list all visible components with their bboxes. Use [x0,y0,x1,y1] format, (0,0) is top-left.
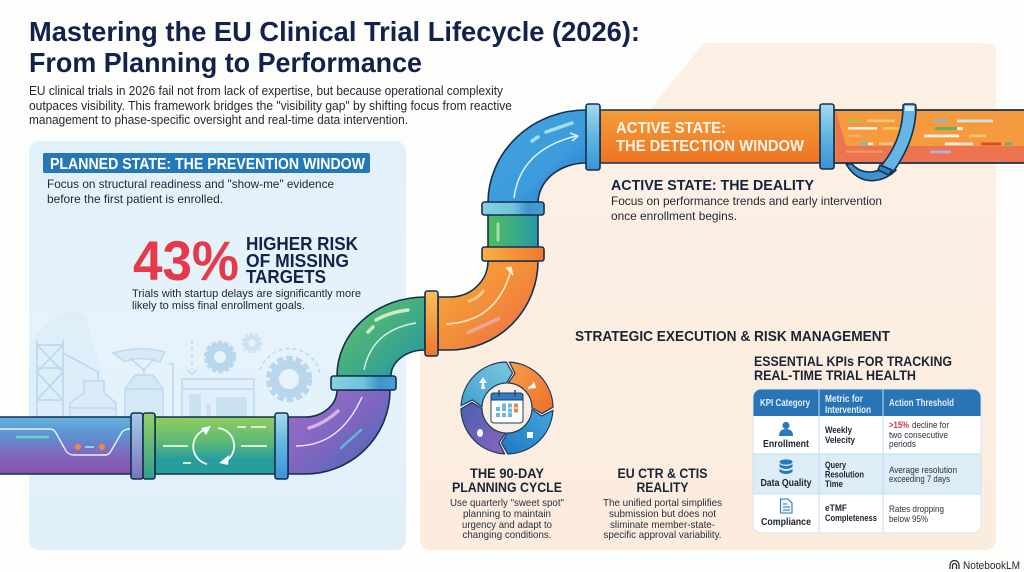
pipe: blue elbow [488,110,587,203]
pipe: purple straight section [0,417,132,474]
intro text: EU clinical trials in 2026 fail not from lack of expertise, but because operational complexity [29,84,504,98]
stat description: Trials with startup delays are significantly more [132,288,361,300]
row: compliance: below 95% [889,514,928,525]
row: enrollment: two consecutive [889,430,948,441]
row: enrollment: Enrollment [763,439,810,450]
active state pipe label: THE DETECTION WINDOW [616,138,804,155]
block: EU CTR and CTIS reality [603,466,722,541]
active state description: Focus on performance trends and early intervention [611,194,882,208]
title: From Planning to Performance [29,47,422,78]
active state heading: ACTIVE STATE: THE DEALITY [611,178,814,194]
stat: 43 percent: 43% [133,229,239,292]
intro text: management to phase-specific oversight and real-time data intervention. [29,113,408,127]
active state pipe label: ACTIVE STATE: [616,120,726,137]
row: data quality: Query [825,460,847,471]
icon: gears [206,334,310,400]
block: EU CTR and CTIS reality: specific approval variability. [604,529,722,541]
panel: planned state background [29,141,406,550]
title: Mastering the EU Clinical Trial Lifecycle (2026): [29,16,640,47]
pipe: orange elbow [438,261,538,350]
icon: calendar [491,390,523,423]
row: data quality: Resolution [825,470,864,480]
table header row: KPI Category [760,398,810,409]
pipe: purple elbow [288,390,390,474]
block: EU CTR and CTIS reality: The unified portal simplifies [603,497,722,509]
pipeline [0,104,1024,479]
title [29,16,640,78]
pipe: green elbow [337,297,425,376]
row: data quality: exceeding 7 days [889,474,950,485]
block: 90-day planning cycle: changing conditions. [462,529,552,541]
row: enrollment [763,420,949,450]
stat description: likely to miss final enrollment goals. [132,300,305,312]
table header row [760,394,954,416]
pipe: orange detection window band [600,110,821,163]
block: 90-day planning cycle: Use quarterly "sweet spot" [450,497,564,509]
row: compliance: Rates dropping [889,504,944,515]
pipe: green straight section with cycle arrows [155,417,276,474]
table header row: Intervention [825,405,871,416]
pipe: clamp strap [846,104,916,181]
planned state description: before the first patient is enrolled. [47,192,223,206]
table header row: Action Threshold [889,398,954,409]
block: 90-day planning cycle: planning to maintain [463,508,551,520]
block: EU CTR and CTIS reality: sliminate member-state- [610,519,715,531]
table header row: Metric for [825,394,863,405]
intro text: outpaces visibility. This framework bridges the "visibility gap" by shifting focus from reactive [29,99,512,113]
row: data quality: Time [825,479,843,490]
planned state heading badge: PLANNED STATE: THE PREVENTION WINDOW [50,156,365,173]
section heading: strategic execution: STRATEGIC EXECUTION & RISK MANAGEMENT [575,329,890,345]
pipe: green vertical section [488,214,538,248]
row: compliance [761,499,944,528]
row: enrollment: Weekly [825,425,853,436]
block: EU CTR and CTIS reality: EU CTR & CTIS [618,466,708,481]
planned state description: Focus on structural readiness and "show-me" evidence [47,177,334,191]
planned state description [47,177,334,206]
stat description [132,288,361,312]
stat label: TARGETS [246,267,326,287]
block: EU CTR and CTIS reality: submission but does not [609,508,716,520]
block: 90-day planning cycle: PLANNING CYCLE [452,480,562,495]
block: EU CTR and CTIS reality: REALITY [636,480,688,495]
row: data quality [760,459,957,490]
pipe: code data section [834,110,1024,163]
flanges [131,104,834,479]
row: data quality: Data Quality [760,478,812,489]
stat label: HIGHER RISK [246,234,358,254]
KPI table [753,389,981,533]
NotebookLM watermark: NotebookLM [963,560,1020,572]
icon: 90-day cycle [459,360,555,456]
KPI heading: ESSENTIAL KPIs FOR TRACKING [754,353,952,369]
KPI heading [754,353,952,383]
row: compliance: Compliance [761,517,811,528]
KPI heading: REAL-TIME TRIAL HEALTH [754,367,916,383]
active state pipe label [616,120,804,155]
panel: active state background [420,43,996,550]
block: 90-day planning cycle: THE 90-DAY [470,466,544,481]
active state description: once enrollment begins. [611,209,737,223]
stat label: OF MISSING [246,251,349,271]
row: compliance: Completeness [825,513,877,524]
active state description [611,194,882,223]
block: 90-day planning cycle [450,466,564,541]
stat label [246,234,358,287]
row: enrollment: decline for [912,420,949,431]
row: enrollment: periods [889,439,916,450]
intro text [29,84,512,127]
row: enrollment: Velecity [825,435,856,446]
row: data quality: Average resolution [889,465,957,476]
row: compliance: eTMF [825,503,847,514]
faded industrial illustration [29,311,320,417]
block: 90-day planning cycle: urgency and adapt to [462,519,552,531]
row: enrollment: >15% [889,420,909,431]
